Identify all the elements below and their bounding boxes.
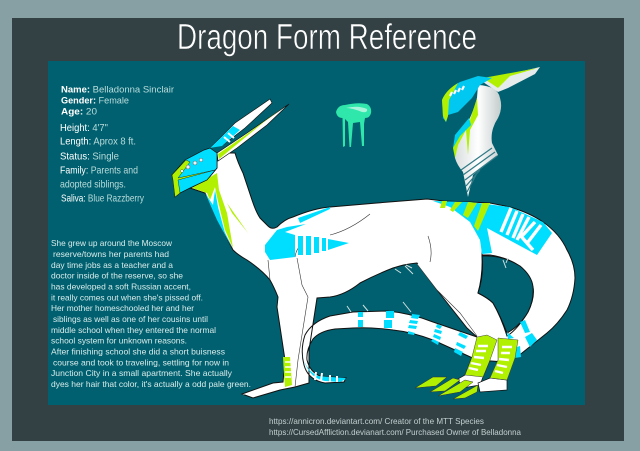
front foot lime sock	[283, 357, 292, 387]
backstory text block: dyes her hair that color, it's actually a odd pale green.	[51, 379, 251, 389]
backstory text block	[51, 238, 251, 389]
back lime bars	[440, 201, 490, 231]
ear: front	[217, 104, 289, 161]
belly spines	[347, 258, 508, 312]
character stats text	[60, 85, 174, 205]
neck lime stripes	[192, 173, 248, 248]
backstory text block: course and took to traveling, settling for now in	[53, 358, 229, 368]
leg detail lines	[268, 214, 477, 387]
icon: dripping saliva blob	[336, 103, 371, 147]
front foot bars	[285, 362, 291, 377]
character stats text: Gender: Female	[61, 96, 129, 106]
back blue stripe band	[433, 201, 552, 255]
character stats text: Family: Parents and	[60, 164, 138, 176]
detail neck lime and blue	[453, 98, 478, 158]
backstory text block: school system for unknown reasons.	[51, 336, 187, 346]
detail neck	[455, 85, 501, 197]
character stats text: Name: Belladonna Sinclair	[61, 85, 174, 95]
ear: back	[210, 99, 272, 148]
head lime snout	[172, 160, 215, 197]
backstory text block: has developed a soft Russian accent,	[51, 282, 191, 292]
hind leg fill	[417, 222, 507, 340]
neck blue stripe	[205, 190, 232, 248]
character stats text: adopted siblings.	[60, 178, 126, 190]
near hind sock	[490, 338, 518, 380]
illustration: head and neck detail study	[442, 67, 540, 197]
far hind sock	[465, 335, 497, 377]
backstory text block: doctor inside of the reserve, so she	[51, 270, 183, 280]
backstory text block: middle school when they entered the normal	[51, 325, 216, 335]
tail white bars	[501, 208, 541, 250]
tail and body silhouette	[190, 153, 575, 398]
head markings: eyes	[180, 158, 203, 172]
detail ears	[480, 67, 540, 92]
backstory text block: She grew up around the Moscow	[51, 238, 173, 248]
character stats text: Height: 4'7"	[60, 122, 108, 134]
far hind foot	[458, 335, 497, 388]
illustration: main dragon	[172, 99, 575, 399]
character stats text: Status: Single	[60, 150, 119, 162]
character stats text: Length: Aprox 8 ft.	[60, 135, 136, 147]
backstory text block: reserve/towns her parents had	[53, 249, 169, 259]
near hind foot	[478, 378, 507, 392]
backstory text block: Her mother homeschooled her and her	[51, 303, 194, 313]
footer credits: https://annicron.deviantart.com/ Creator of the MTT Species	[269, 416, 484, 426]
lime claws	[415, 377, 478, 399]
title: Dragon Form Reference	[177, 16, 477, 57]
backstory text block: siblings as well as one of her cousins until	[53, 314, 208, 324]
backstory text block: Junction City in a small apartment. She actually	[51, 368, 233, 378]
detail head	[442, 76, 492, 122]
sock white bars	[469, 346, 512, 373]
tail hole	[478, 256, 533, 333]
footer credits: https://CursedAffliction.devianart.com/ Purchased Owner of Belladonna	[269, 427, 521, 437]
character stats text: Age: 20	[61, 106, 97, 116]
curl white bars	[315, 372, 337, 382]
rump and tail inner edge	[470, 220, 533, 336]
lower tail stripes	[302, 311, 537, 382]
character stats text: Saliva: Blue Razzberry	[61, 193, 145, 205]
backstory text block: day time jobs as a teacher and a	[51, 260, 173, 270]
backstory text block: it really comes out when she's pissed off.	[51, 292, 203, 302]
teal main panel	[48, 61, 585, 405]
shoulder blue patch	[265, 224, 306, 260]
shoulder stripes	[298, 207, 349, 255]
footer credits	[269, 416, 521, 437]
detail neck base stripes	[461, 148, 497, 192]
backstory text block: After finishing school she did a short buisness	[51, 346, 225, 356]
head	[172, 148, 217, 197]
